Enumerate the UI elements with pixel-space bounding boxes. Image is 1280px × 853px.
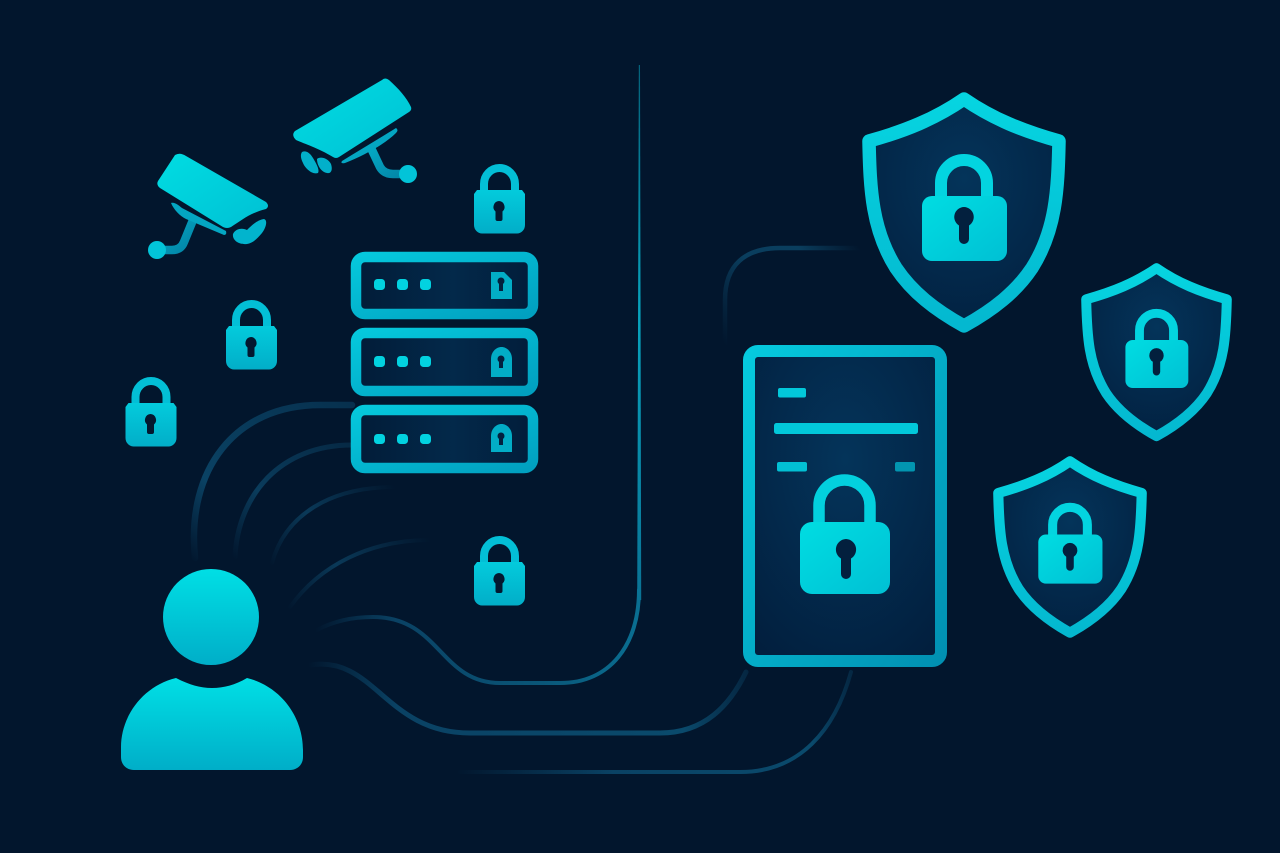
user icon [121,569,303,770]
shield: large [869,99,1059,326]
shield: medium right [1086,268,1227,436]
camera: lower left [148,154,268,259]
line: user to server three [272,487,395,563]
connection lines [194,65,862,772]
server unit one [356,257,533,314]
user head [163,569,259,665]
line: lower route to document [460,672,851,772]
shield: medium lower [998,461,1142,633]
icon: padlock below servers [474,540,525,606]
line: lower curve from divider to user [317,590,639,683]
camera: upper right [293,78,417,183]
document text lines [774,388,918,472]
line: user to server two [235,445,352,557]
icon: padlock far left [126,381,176,446]
line: tapered vertical divider [637,65,641,600]
document panel [749,351,941,661]
server stack [356,257,533,468]
line: document to shield [725,248,862,345]
icon: padlock above servers [474,168,525,234]
line: user to server one [194,405,352,558]
document padlock [800,480,890,594]
line: user to open space [290,540,430,607]
server unit three [356,410,533,468]
line: user to document [310,664,746,733]
user shoulders [121,678,303,770]
server unit two [356,333,533,391]
icon: padlock left middle [226,304,277,370]
